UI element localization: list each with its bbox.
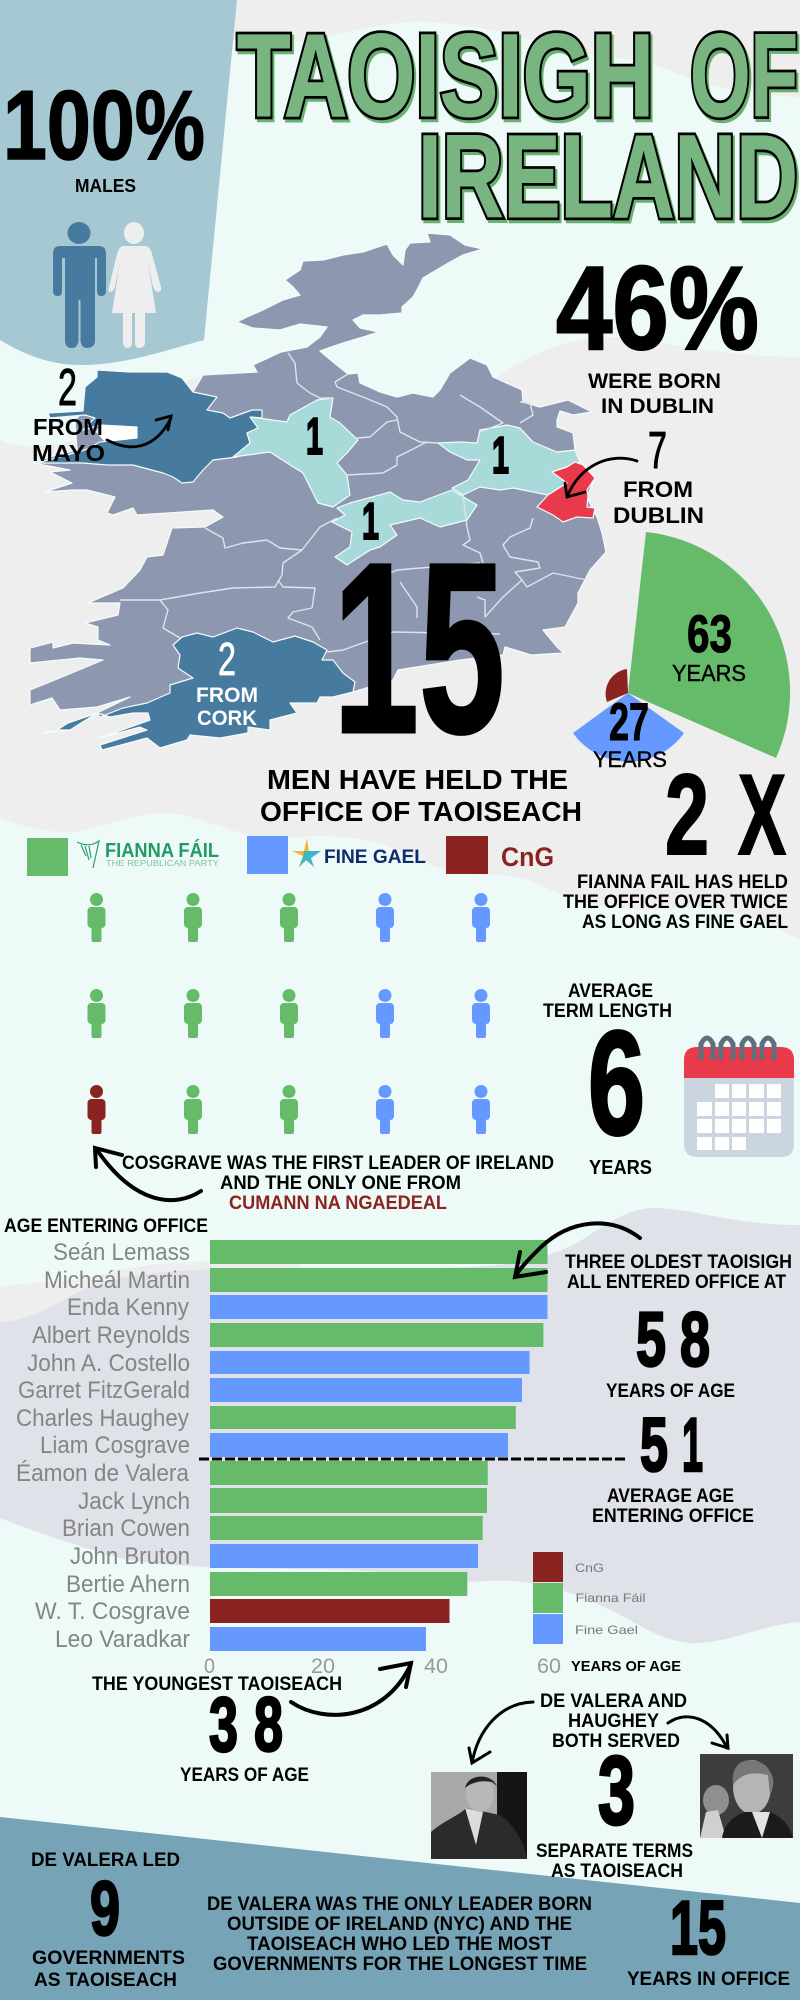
map counts: 1 (306, 408, 323, 466)
bar labels: John A. Costello (27, 1350, 190, 1377)
bar labels: Charles Haughey (16, 1405, 189, 1432)
x axis: YEARS OF AGE (571, 1658, 681, 1675)
average line (199, 1458, 628, 1460)
county: Meath (438, 425, 580, 495)
callout: Cosgrave first leader: COSGRAVE WAS THE FIRST LEADER OF IRELAND (122, 1153, 554, 1174)
icon: man (53, 222, 106, 348)
callout: de Valera led 9 governments: GOVERNMENTS (32, 1948, 185, 1969)
callout: from Cork (196, 633, 258, 730)
chart: age entering office: AGE ENTERING OFFICE (4, 1216, 208, 1237)
label: males: MALES (75, 176, 136, 196)
stat: 2 X: THE OFFICE OVER TWICE (563, 892, 788, 913)
stat: 15 years in office (627, 1886, 790, 1990)
x axis: 40 (424, 1655, 448, 1678)
inlet: Clew Bay (96, 425, 137, 442)
bar labels: W. T. Cosgrave (35, 1598, 190, 1625)
chart legend (533, 1552, 646, 1644)
arrow: to top bars (515, 1223, 640, 1277)
arrow: to Mayo (107, 416, 171, 447)
stat: 46% born in Dublin (556, 242, 759, 418)
heading: men have held the office: MEN HAVE HELD THE (267, 764, 568, 795)
chart legend: Fine Gael (575, 1623, 638, 1637)
stat: average term length (543, 981, 672, 1179)
icon: Fianna Fail harp (77, 841, 99, 868)
title: TAOISIGH (239, 13, 656, 145)
legend: party logos: CnG (501, 842, 554, 872)
chart: years in office by party: 27 (609, 693, 649, 752)
stat: 46% born in Dublin: IN DUBLIN (601, 395, 714, 418)
bar labels: Albert Reynolds (32, 1322, 190, 1349)
bar labels: Micheál Martin (44, 1267, 190, 1294)
chart legend: Fianna Fáil (576, 1591, 646, 1605)
map counts: 1 (492, 427, 509, 485)
heading: men have held the office: OFFICE OF TAOISEACH (260, 796, 582, 827)
photo: Haughey (700, 1754, 793, 1838)
stat: 15 years in office: 15 (670, 1886, 726, 1971)
callout: from Dublin: 7 (648, 422, 667, 480)
legend: party logos (27, 836, 554, 876)
arrow: to de Valera (469, 1702, 533, 1763)
callout: three oldest: ALL ENTERED OFFICE AT (567, 1272, 786, 1293)
stat: average term length: TERM LENGTH (543, 1001, 672, 1022)
title: TAOISIGH (237, 10, 654, 142)
callout: separate terms: 3 (598, 1736, 635, 1845)
callout: from Dublin (565, 422, 704, 528)
callout: de Valera led 9 governments (31, 1850, 185, 1991)
callout: separate terms: AS TAOISEACH (551, 1861, 683, 1882)
bar labels (16, 1239, 190, 1653)
callout: Cosgrave first leader: AND THE ONLY ONE FROM (220, 1173, 461, 1194)
county: Dublin (537, 462, 595, 522)
callout: separate terms: SEPARATE TERMS (536, 1841, 693, 1862)
title: TAOISIGH (237, 10, 654, 142)
icon: woman (109, 222, 161, 348)
stat: 100%: 100% (3, 70, 205, 180)
stat: average age 51 (592, 1403, 754, 1527)
callout: de Valera led 9 governments: 9 (90, 1866, 120, 1952)
chart: map of Ireland by county (30, 233, 606, 750)
bar labels: Bertie Ahern (66, 1571, 190, 1598)
map counts (306, 408, 509, 551)
bar labels: Brian Cowen (62, 1515, 190, 1542)
x axis: 60 (537, 1655, 561, 1678)
arrow: to Dublin (565, 458, 637, 497)
callout: from Mayo: 2 (58, 359, 77, 417)
callout: from Mayo: MAYO (32, 440, 105, 466)
callout: Cosgrave first leader (95, 1148, 554, 1214)
stat: 46% born in Dublin: 46% (556, 242, 759, 375)
legend: party logos: THE REPUBLICAN PARTY (106, 859, 220, 868)
chart: age entering office (4, 1216, 681, 1678)
bar labels: John Bruton (70, 1543, 190, 1570)
icon: Fine Gael star (292, 838, 321, 867)
callout: Cosgrave first leader: CUMANN NA NGAEDEAL (229, 1193, 447, 1214)
legend: party logos: FIANNA FÁIL (105, 839, 219, 862)
photo: de Valera (431, 1772, 527, 1859)
legend: party logos: FINE GAEL (324, 847, 426, 868)
bars (210, 1240, 548, 1651)
bar labels: Enda Kenny (67, 1294, 189, 1321)
text block: only leader born outside Ireland (207, 1894, 592, 1975)
callout: separate terms: DE VALERA AND (540, 1691, 687, 1712)
x axis (204, 1655, 681, 1678)
arrow: to Varadkar bar (291, 1663, 411, 1715)
bar labels: Garret FitzGerald (18, 1377, 190, 1404)
stat: 2 X: FIANNA FAIL HAS HELD (577, 872, 788, 893)
callout: from Mayo: FROM (33, 414, 103, 440)
callout: from Dublin: DUBLIN (613, 503, 704, 528)
callout: separate terms: HAUGHEY (568, 1711, 659, 1732)
icon: calendar (684, 1038, 794, 1157)
bar labels: Éamon de Valera (16, 1460, 190, 1487)
stat: average term length: YEARS (589, 1157, 652, 1179)
panel: footer band (0, 1817, 800, 2000)
callout: three oldest: 5 (636, 1297, 666, 1383)
callout: three oldest (515, 1223, 792, 1402)
callout: de Valera led 9 governments: DE VALERA LED (31, 1850, 180, 1871)
heading: men have held the office (260, 764, 582, 827)
stat: average term length: 6 (588, 1001, 645, 1166)
callout: separate terms (469, 1691, 728, 1882)
county: Offaly (332, 490, 477, 565)
text block: only leader born outside Ireland: GOVERNMENTS FOR THE LONGEST TIME (213, 1954, 587, 1975)
stat: average term length: AVERAGE (568, 981, 653, 1002)
chart: years in office by party: YEARS (672, 660, 746, 686)
callout: youngest: YEARS OF AGE (180, 1765, 309, 1786)
bar labels: Seán Lemass (53, 1239, 190, 1266)
chart: years in office by party (573, 532, 790, 772)
callout: from Mayo (32, 359, 171, 466)
stat: 46% born in Dublin: WERE BORN (588, 370, 721, 393)
stat: 15: 15 (333, 513, 505, 784)
callout: from Cork: CORK (197, 707, 257, 730)
chart: years in office by party: 63 (687, 605, 732, 664)
callout: youngest (92, 1663, 411, 1786)
stat: 2 X: AS LONG AS FINE GAEL (582, 912, 788, 933)
county: Cork (57, 628, 355, 750)
callout: from Cork: 2 (218, 633, 236, 685)
bar labels: Jack Lynch (78, 1488, 190, 1515)
chart: years in office by party: YEARS (593, 747, 667, 772)
bar labels: Liam Cosgrave (40, 1432, 190, 1459)
callout: separate terms: BOTH SERVED (552, 1731, 680, 1752)
title (237, 10, 800, 246)
county: Roscommon (233, 398, 358, 507)
stat: average age 51: 1 (682, 1403, 703, 1488)
x axis: 20 (311, 1655, 335, 1678)
x axis: 0 (204, 1655, 215, 1678)
text block: only leader born outside Ireland: TAOISEACH WHO LED THE MOST (247, 1934, 552, 1955)
text block: only leader born outside Ireland: OUTSIDE OF IRELAND (NYC) AND THE (227, 1914, 572, 1935)
stat: 2 X (563, 752, 788, 933)
stat: 15 years in office: YEARS IN OFFICE (627, 1969, 790, 1990)
bar labels: Leo Varadkar (55, 1626, 190, 1653)
arrow: to Haughey (668, 1717, 728, 1748)
county: Mayo (37, 370, 262, 483)
callout: youngest: 8 (254, 1682, 283, 1768)
callout: three oldest: 8 (680, 1297, 710, 1383)
panel: male statistic banner (0, 0, 237, 365)
callout: youngest: 3 (209, 1682, 238, 1768)
stat: 2 X: 2 (665, 752, 709, 879)
stat: average age 51: ENTERING OFFICE (592, 1506, 754, 1527)
text block: only leader born outside Ireland: DE VALERA WAS THE ONLY LEADER BORN (207, 1894, 592, 1915)
callout: from Dublin: FROM (623, 477, 693, 502)
stat: average age 51: 5 (640, 1403, 668, 1488)
chart legend: CnG (575, 1561, 604, 1575)
callout: youngest: THE YOUNGEST TAOISEACH (92, 1674, 342, 1695)
callout: three oldest: YEARS OF AGE (606, 1381, 735, 1402)
arrow: to Cosgrave figure (95, 1148, 201, 1200)
callout: de Valera led 9 governments: AS TAOISEACH (34, 1970, 177, 1991)
map counts: 1 (362, 493, 379, 551)
stat: average age 51: AVERAGE AGE (607, 1486, 734, 1507)
callout: from Cork: FROM (196, 684, 258, 707)
pictogram: 15 leaders by party (88, 893, 490, 1134)
